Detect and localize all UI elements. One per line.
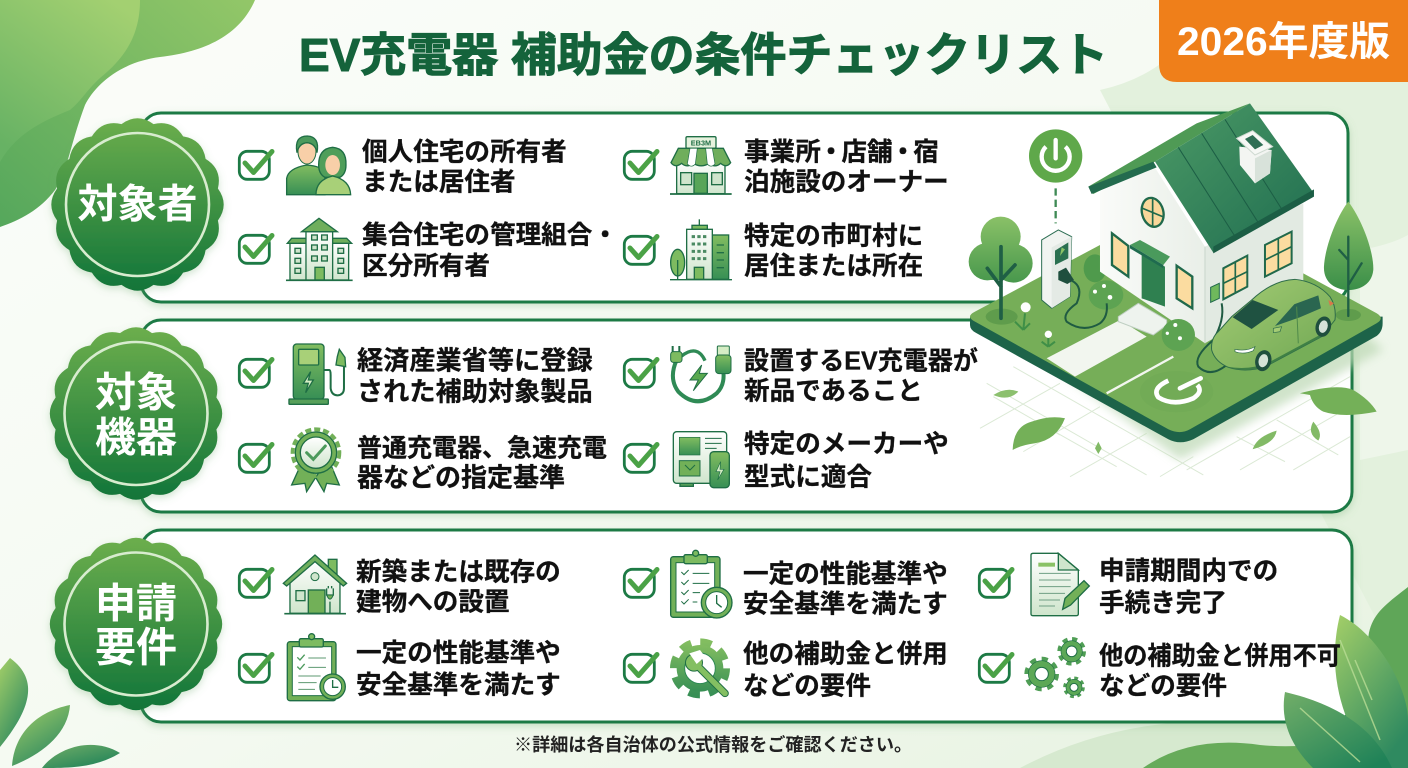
icon: couple xyxy=(287,136,351,195)
item: 申請期間内 xyxy=(979,553,1278,618)
panel: 対象者 xyxy=(51,113,1348,302)
icon: document and pencil xyxy=(1031,553,1089,616)
text: 安全基準を満たす xyxy=(743,590,948,618)
flowers xyxy=(1015,302,1055,347)
badge: 対象機器 xyxy=(50,327,222,500)
edition tab xyxy=(1159,0,1408,82)
badge: 対象者 xyxy=(51,118,224,291)
item: 経済産業省 xyxy=(239,344,593,406)
icon: three gears xyxy=(1027,639,1084,696)
badge: 申請要件: 申請 xyxy=(95,580,177,626)
badge: 対象者: 対象者 xyxy=(78,182,198,226)
leaves xyxy=(993,387,1377,454)
icon: apartment xyxy=(286,218,353,280)
background shapes right xyxy=(1020,0,1408,768)
text: された補助対象製品 xyxy=(357,376,593,406)
text: 新築または既存の xyxy=(356,558,561,586)
round window xyxy=(1139,195,1167,229)
illustration: house with EV charger xyxy=(969,103,1383,477)
walkway xyxy=(1047,320,1147,377)
panel frame xyxy=(141,530,1352,722)
back bush xyxy=(1084,254,1106,282)
text: 他の補助金と併用不可 xyxy=(1099,642,1341,670)
text: 型式に適合 xyxy=(744,462,872,492)
item: 個人住宅 xyxy=(239,136,567,196)
text: 建物への設置 xyxy=(356,588,510,616)
item: 特定のメーカー xyxy=(624,430,949,492)
title: EV充電器 補助金の条件チェックリスト xyxy=(299,29,1108,81)
panel frame xyxy=(141,320,1352,512)
left tree xyxy=(969,217,1033,325)
footnote: ※詳細は各自治体の公式情報をご確認ください。 xyxy=(514,734,912,755)
icon: clipboard with clock xyxy=(287,634,345,701)
icon: charging pump xyxy=(289,344,346,404)
text: 区分所有者 xyxy=(362,252,490,280)
decoration: top-left leaf blob xyxy=(0,0,255,227)
house xyxy=(1088,103,1314,343)
item: 併用不可 xyxy=(979,639,1341,700)
parking markings xyxy=(1107,357,1213,412)
text: 一定の性能基準や xyxy=(743,560,948,588)
item: 普通充電器 xyxy=(239,429,607,492)
icon: gear with wrench xyxy=(674,642,726,694)
text: などの要件 xyxy=(1099,672,1227,700)
text: 経済産業省等に登録 xyxy=(357,346,593,376)
text: 設置するEV充電器が xyxy=(744,346,978,376)
item: 設置するEV充電器 xyxy=(624,346,978,406)
text: 特定の市町村に xyxy=(744,222,923,250)
icon: office buildings xyxy=(670,219,732,280)
panel frame xyxy=(141,113,1348,302)
charger xyxy=(1042,230,1107,328)
text: 個人住宅の所有者 xyxy=(362,138,567,166)
roof xyxy=(1088,103,1250,194)
ground grid xyxy=(980,367,1350,477)
text: 申請期間内での xyxy=(1099,556,1278,586)
bushes xyxy=(1089,280,1195,351)
text: 器などの指定基準 xyxy=(357,462,565,492)
badge: 申請要件 xyxy=(50,538,222,710)
wall socket xyxy=(1211,283,1219,302)
decoration: bottom-left leaves xyxy=(0,658,120,768)
text: または居住者 xyxy=(362,168,516,196)
front windows xyxy=(1223,256,1247,299)
door xyxy=(1142,255,1165,307)
right tree xyxy=(1324,202,1373,321)
chimney xyxy=(1239,147,1272,183)
text: 普通充電器、急速充電 xyxy=(357,434,607,462)
text: 他の補助金と併用 xyxy=(743,640,948,668)
item: 新築 xyxy=(239,555,561,616)
icon: storefront xyxy=(670,137,732,194)
walls xyxy=(1100,165,1205,343)
item: 事業所 xyxy=(624,137,949,196)
side windows xyxy=(1112,233,1128,277)
icon: cable with bolt xyxy=(671,346,731,401)
item: 性能基準 1 xyxy=(239,634,561,701)
icon: house with plug xyxy=(283,555,347,614)
icon: checklist with clock xyxy=(671,550,732,618)
text: 新品であること xyxy=(744,376,923,406)
text: 泊施設のオーナー xyxy=(744,168,949,196)
item: 集合住宅 xyxy=(239,218,618,280)
text: 居住または所在 xyxy=(744,252,923,280)
badge: 対象機器: 機器 xyxy=(95,414,177,460)
text: 安全基準を満たす xyxy=(356,670,561,700)
icon: storefront: EB3M xyxy=(691,138,711,147)
steps xyxy=(1118,303,1167,335)
car xyxy=(1197,279,1335,373)
icon: award rosette xyxy=(292,429,339,492)
text: 集合住宅の管理組合・ xyxy=(362,220,618,250)
icon: charger device xyxy=(673,432,729,488)
panel: 対象機器 xyxy=(50,320,1352,512)
text: などの要件 xyxy=(743,672,871,700)
power symbol with dashed link xyxy=(1029,129,1082,223)
badge: 対象機器: 対象 xyxy=(95,370,177,416)
text: 事業所・店舗・宿 xyxy=(744,138,939,166)
item: 他の補助金と併用 xyxy=(624,640,948,700)
badge: 申請要件: 要件 xyxy=(95,624,177,670)
text: 手続き完了 xyxy=(1099,588,1227,618)
platform shadow xyxy=(1053,323,1383,460)
platform xyxy=(970,245,1383,442)
text: 特定のメーカーや xyxy=(744,430,949,458)
item: 性能基準 2 xyxy=(624,550,948,618)
panel: 申請要件 xyxy=(50,530,1352,722)
item: 特定の市町村 xyxy=(624,219,923,280)
decoration: bottom-right leaves xyxy=(1284,587,1408,768)
edition tab: 2026年度版 xyxy=(1177,20,1390,64)
text: 一定の性能基準や xyxy=(356,638,561,668)
